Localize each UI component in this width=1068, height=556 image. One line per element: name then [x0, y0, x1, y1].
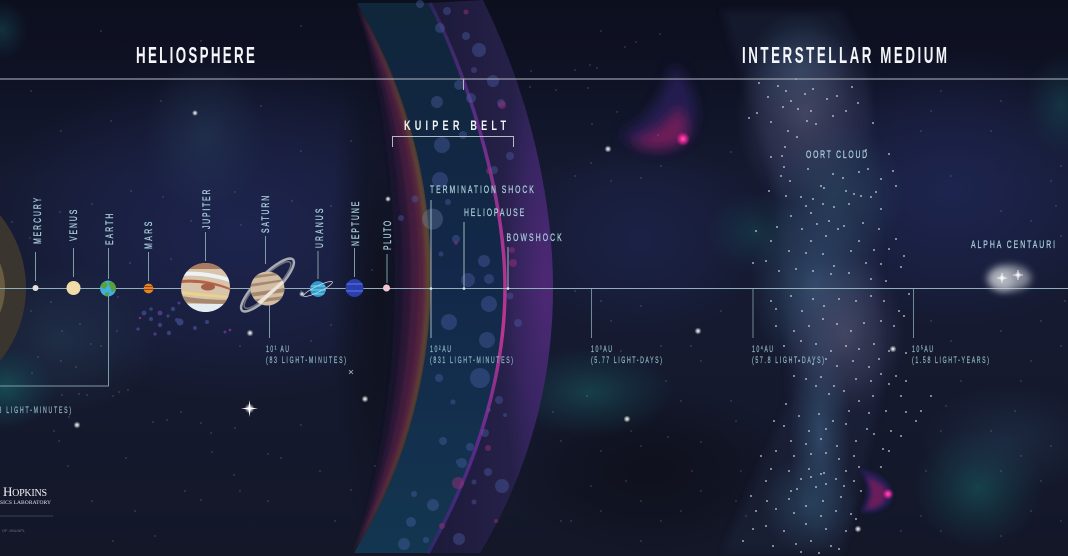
logo: johns hopkins apl — [0, 484, 53, 533]
label: oort cloud: OORT CLOUD — [806, 148, 867, 160]
label: neptune: NEPTUNE — [349, 202, 361, 246]
earth distance leader — [0, 296, 108, 386]
main distance axis — [0, 288, 1068, 290]
small cross star — [349, 370, 353, 374]
sun corona — [0, 173, 26, 403]
distance: 100 au: 10²AU — [430, 343, 451, 354]
logo: johns hopkins apl: SICS LABORATORY — [0, 500, 51, 506]
label: venus: VENUS — [67, 210, 79, 241]
asteroid belt — [136, 302, 231, 336]
planet: mercury — [32, 285, 38, 291]
distance: 100 au — [430, 343, 513, 365]
distance: 100000 au: 10⁵AU — [912, 343, 933, 354]
bow shock band — [430, 0, 553, 553]
heliopause magenta line — [428, 3, 505, 553]
sparkle star — [241, 400, 258, 417]
kuiper belt tick — [462, 79, 464, 90]
distance: 10000 au — [752, 343, 824, 365]
label: jupiter: JUPITER — [200, 189, 212, 229]
planet: jupiter — [181, 263, 230, 312]
comet: upper — [619, 65, 696, 149]
kuiper belt objects — [398, 0, 522, 550]
logo: johns hopkins apl: OF JHU/APL — [2, 528, 26, 533]
planet leader lines — [36, 232, 387, 283]
planet: mars — [143, 284, 154, 294]
label: heliopause: HELIOPAUSE — [464, 206, 524, 218]
boundary leader lines — [431, 200, 508, 338]
distance ticks — [592, 289, 914, 338]
top divider line — [0, 78, 1068, 80]
alpha centauri stars — [987, 265, 1031, 291]
planet: uranus — [303, 281, 333, 297]
distance: 10 au — [266, 343, 346, 365]
planet: neptune — [345, 279, 364, 297]
heading: heliosphere: HELIOSPHERE — [136, 42, 255, 68]
planet: earth — [100, 280, 117, 297]
kuiper belt heading: KUIPER BELT — [404, 117, 507, 134]
termination shock to heliopause band — [354, 3, 505, 553]
planet: venus — [66, 281, 80, 295]
heading: interstellar medium: INTERSTELLAR MEDIUM — [742, 42, 947, 68]
distance: 1000 au — [591, 343, 662, 365]
label: uranus: URANUS — [313, 209, 325, 248]
bright stars — [74, 110, 896, 532]
lighter termination shock object — [422, 208, 443, 230]
saturn distance leader — [268, 301, 270, 338]
label: pluto: PLUTO — [381, 221, 393, 250]
kuiper belt bracket — [392, 136, 514, 147]
logo: johns hopkins apl: HOPKINS — [3, 484, 47, 499]
oort cloud: stars — [743, 79, 931, 553]
label: mercury: MERCURY — [31, 198, 43, 244]
distance: 10000 au: (57.8 LIGHT-DAYS) — [752, 354, 824, 365]
distance: 10 au: (83 LIGHT-MINUTES) — [266, 354, 346, 365]
label: alpha centauri: ALPHA CENTAURI — [971, 238, 1055, 250]
planet: saturn — [240, 257, 296, 313]
kuiper belt: pink objects — [439, 10, 517, 529]
label: mars: MARS — [142, 222, 154, 249]
distance: 100 au: (831 LIGHT-MINUTES) — [430, 354, 513, 365]
comet: lower — [860, 470, 894, 512]
distance: 100000 au: (1.58 LIGHT-YEARS) — [912, 354, 989, 365]
distance: 100000 au — [912, 343, 989, 365]
planet: pluto — [383, 284, 390, 292]
distance: 1000 au: (5.77 LIGHT-DAYS) — [591, 354, 662, 365]
oort cloud band — [722, 10, 905, 555]
label: saturn: SATURN — [259, 196, 271, 233]
label: bowshock: BOWSHOCK — [506, 231, 562, 243]
boundary dots — [430, 287, 509, 290]
label: earth: EARTH — [103, 214, 115, 245]
heliosheath: rainbow edge of the solar wind — [354, 3, 431, 553]
label: termination shock: TERMINATION SHOCK — [430, 183, 534, 195]
distance: 10000 au: 10⁴AU — [752, 343, 773, 354]
distance: 10 au: 10¹ AU — [266, 343, 289, 354]
distance: 1000 au: 10³AU — [591, 343, 612, 354]
